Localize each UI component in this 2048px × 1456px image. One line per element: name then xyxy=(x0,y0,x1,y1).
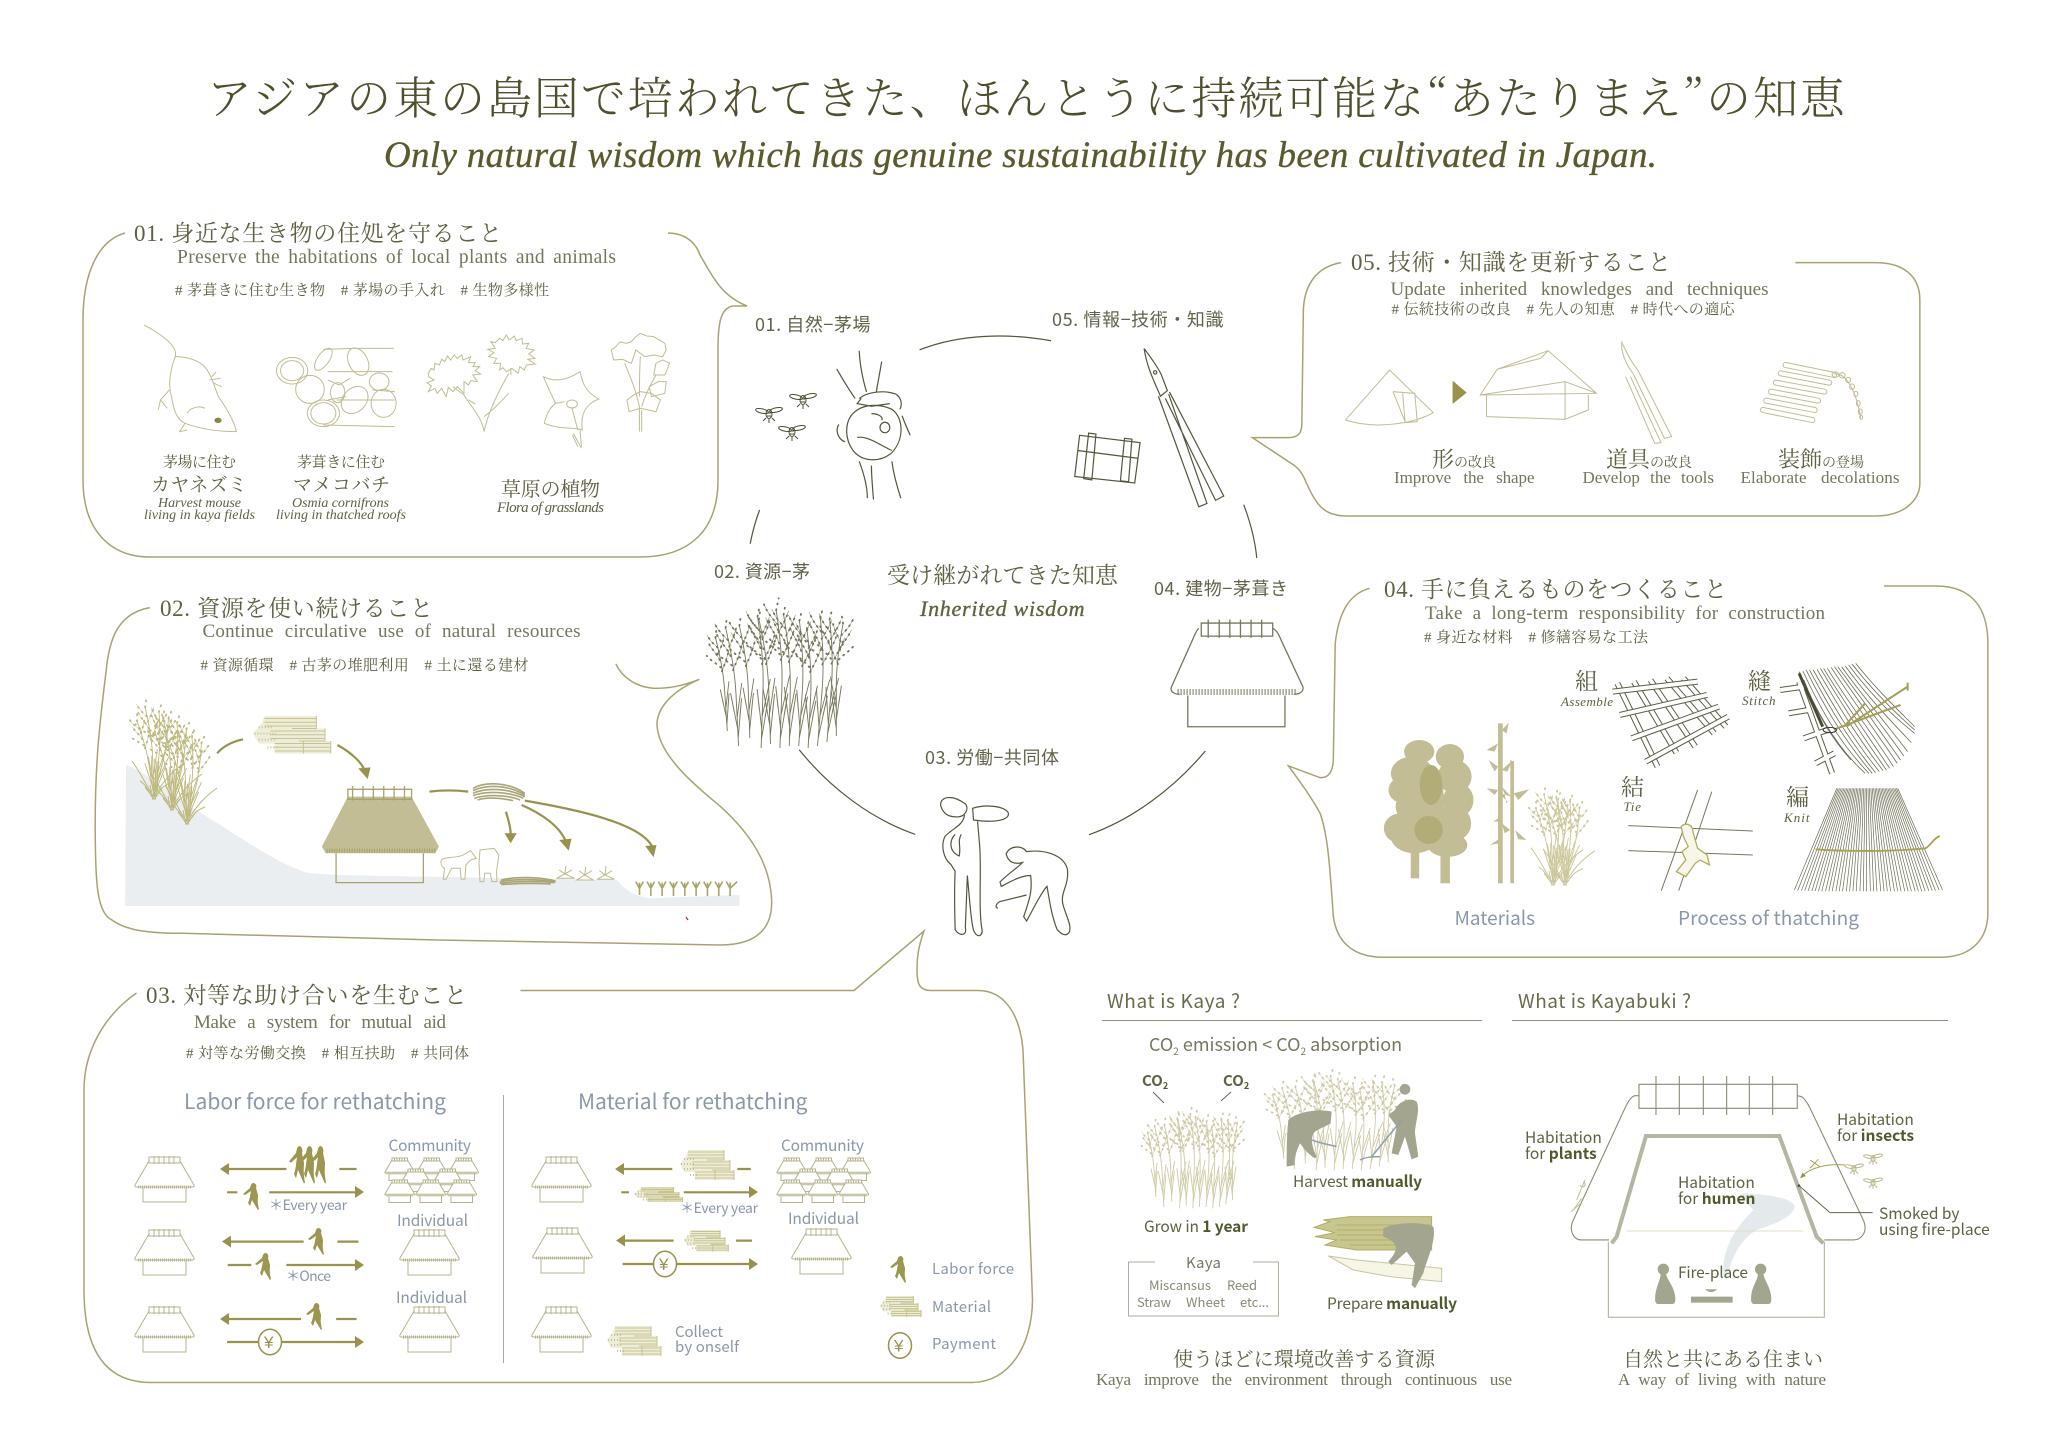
label: flora: 草原の植物 xyxy=(501,478,600,501)
label: insects: insects xyxy=(1861,1124,1914,1146)
caption: tools: Develop the tools xyxy=(1582,468,1714,487)
legend: Labor force xyxy=(932,1258,1014,1279)
center text xyxy=(887,563,1119,621)
label: knit: 編 xyxy=(1786,785,1809,810)
diagram: labor force exchange xyxy=(135,1134,479,1355)
icon: improved tool xyxy=(1622,342,1672,443)
tags 01: # 茅葺きに住む生き物 # 茅場の手入れ # 生物多様性 xyxy=(175,281,549,299)
icon: assemble lattice xyxy=(1613,678,1728,767)
label: mason bee: living in thatched roofs xyxy=(276,508,407,523)
diagram: labor force exchange: Individual xyxy=(397,1209,468,1231)
speech bubble outline xyxy=(1288,586,1988,957)
caption: tools xyxy=(1582,447,1714,487)
caption: decoration: Elaborate decolations xyxy=(1740,468,1900,487)
box: kaya types: Miscansus xyxy=(1149,1275,1211,1294)
icon: mouse on nest xyxy=(837,351,910,499)
title: アジアの東の島国で培われてきた、ほんとうに持続可能な“あたりまえ”の知恵 xyxy=(207,62,1845,127)
heading 05: 05. 技術・知識を更新すること xyxy=(1351,250,1671,275)
co2 icons: CO xyxy=(1223,1070,1244,1091)
co2 balance: absorption xyxy=(1306,1031,1402,1057)
label: prepare: Prepare manually xyxy=(1327,1292,1457,1314)
english heading 04: Take a long-term responsibility for construction xyxy=(1425,603,1826,624)
caption: kaya xyxy=(1096,1348,1512,1389)
label: flora: Flora of grasslands xyxy=(496,500,604,516)
caption: decoration: 装飾の登場 xyxy=(1778,447,1864,472)
diagram: labor force exchange: ＊Every year xyxy=(269,1195,348,1215)
tags 04: # 身近な材料 # 修繕容易な工法 xyxy=(1424,628,1649,646)
label: process: Process of thatching xyxy=(1678,904,1859,931)
heading 03: 03. 対等な助け合いを生むこと xyxy=(146,983,467,1008)
icon: stitch thatch xyxy=(1780,663,1915,773)
label: smoked: using fire-place xyxy=(1879,1218,1990,1240)
diagram: material exchange: ¥ xyxy=(658,1255,669,1274)
caption: kaya: 使うほどに環境改善する資源 xyxy=(1173,1348,1436,1371)
panel: 05 techniques xyxy=(1252,250,1920,516)
label: assemble: 組 xyxy=(1575,669,1598,694)
co2 icons: CO xyxy=(1142,1070,1163,1091)
icon: materials trees bamboo grass xyxy=(1384,723,1595,886)
box: kaya types: Reed xyxy=(1227,1275,1257,1294)
caption: kayabuki xyxy=(1618,1348,1826,1389)
label: flora xyxy=(496,478,604,516)
label: human: humen xyxy=(1702,1187,1755,1209)
label: smoked: Smoked by xyxy=(1879,1202,1960,1224)
panel: 01 habitats xyxy=(83,221,747,557)
label: grow: Grow in 1 year xyxy=(1144,1215,1248,1237)
co2 balance: 2 xyxy=(1300,1043,1306,1058)
speech bubble outline xyxy=(83,233,747,557)
english heading 03: Make a system for mutual aid xyxy=(194,1012,446,1033)
english heading 01: Preserve the habitations of local plants and animals xyxy=(177,247,616,268)
diagram: material exchange xyxy=(532,1134,871,1357)
icon: tool box xyxy=(1075,433,1140,483)
icon: rice field xyxy=(636,882,737,896)
icon: kaya reeds xyxy=(705,598,855,748)
center text: Inherited wisdom xyxy=(919,596,1084,621)
panel: 03 mutual aid xyxy=(84,931,1032,1382)
heading: material: Material for rethatching xyxy=(578,1086,808,1116)
label: fire-place: Fire-place xyxy=(1678,1261,1748,1283)
english heading 02: Continue circulative use of natural resources xyxy=(202,621,580,642)
icon: thatched house xyxy=(322,786,439,883)
label: mason bee xyxy=(276,453,407,523)
tags 02: # 資源循環 # 古茅の堆肥利用 # 土に還る建材 xyxy=(200,656,528,674)
icon: preparing thatch xyxy=(1314,1217,1442,1288)
legend: ¥ xyxy=(893,1336,904,1356)
central cycle xyxy=(705,306,1303,936)
label: knit xyxy=(1783,785,1810,825)
box: kaya types: etc... xyxy=(1240,1292,1269,1311)
label: building: 04. 建物−茅葺き xyxy=(1154,575,1288,601)
caption: shape xyxy=(1394,447,1534,487)
label: harvest mouse: 茅場に住む xyxy=(163,453,236,471)
caption: kayabuki: 自然と共にある住まい xyxy=(1623,1348,1823,1371)
panel: 02 resources xyxy=(95,596,772,945)
box: kaya types: Straw xyxy=(1137,1292,1172,1311)
label: harvest mouse: living in kaya fields xyxy=(144,508,256,523)
legend: Payment xyxy=(932,1333,996,1354)
label: assemble xyxy=(1560,669,1613,709)
panel: 04 construction xyxy=(1288,577,1988,957)
label: insects: Habitation xyxy=(1837,1108,1914,1130)
flow arrows xyxy=(217,739,656,857)
label: plants: plants xyxy=(1549,1142,1597,1164)
label: mason bee: マメコバチ xyxy=(293,475,390,496)
speech bubble outline xyxy=(84,931,1032,1382)
caption: shape: Improve the shape xyxy=(1394,468,1534,487)
icon: harvesting people xyxy=(1263,1068,1418,1171)
icon: growing kaya xyxy=(1140,1106,1246,1209)
label: human: Habitation xyxy=(1678,1171,1755,1193)
co2 icons: 2 xyxy=(1163,1079,1168,1092)
diagram: material exchange: ＊Every year xyxy=(680,1198,759,1218)
label: harvest mouse: Harvest mouse xyxy=(157,496,241,511)
tags 03: # 対等な労働交換 # 相互扶助 # 共同体 xyxy=(186,1045,469,1062)
icon: radish crops xyxy=(556,866,614,880)
label: mason bee: 茅葺きに住む xyxy=(297,453,385,471)
icon: bees xyxy=(755,392,817,441)
label: resource: 02. 資源−茅 xyxy=(714,558,810,584)
heading: what is kaya: What is Kaya ? xyxy=(1107,987,1240,1014)
label: insects: for xyxy=(1837,1124,1861,1146)
diagram: labor force exchange: Community xyxy=(388,1134,471,1156)
icon: knit thatch xyxy=(1794,788,1943,891)
diagram: kayabuki section xyxy=(1571,1076,1873,1317)
label: harvest mouse: カヤネズミ xyxy=(151,474,247,496)
label: plants: Habitation xyxy=(1525,1126,1602,1148)
heading 01: 01. 身近な生き物の住処を守ること xyxy=(134,221,502,246)
label: labor: 03. 労働−共同体 xyxy=(925,744,1059,770)
label: tie: Tie xyxy=(1624,799,1641,814)
box: kaya types: Wheet xyxy=(1186,1292,1225,1311)
label: stitch xyxy=(1742,669,1776,708)
diagram: material exchange: Collect xyxy=(675,1321,723,1342)
label: human: for xyxy=(1678,1187,1702,1209)
diagram: labor force exchange: Individual xyxy=(396,1286,467,1308)
label: harvest mouse xyxy=(144,453,256,523)
cycle arcs xyxy=(750,336,1257,835)
diagram: labor force exchange: ¥ xyxy=(263,1333,274,1352)
heading: what is kayabuki: What is Kayabuki ? xyxy=(1518,987,1691,1014)
label: mason bee: Osmia cornifrons xyxy=(292,496,390,511)
label: materials: Materials xyxy=(1454,904,1535,931)
icon: bee in thatch tubes xyxy=(277,346,396,427)
caption: kayabuki: A way of living with nature xyxy=(1618,1370,1826,1389)
co2 icons: 2 xyxy=(1244,1079,1249,1092)
icon: decorated ridge xyxy=(1763,365,1863,420)
icon: old thatch piles xyxy=(473,784,555,885)
heading 04: 04. 手に負えるものをつくること xyxy=(1384,577,1727,602)
label: plants: for xyxy=(1525,1142,1549,1164)
icon: thatching shears xyxy=(1144,349,1224,507)
label: stitch: Stitch xyxy=(1742,693,1776,708)
section: what is kayabuki xyxy=(1512,987,1990,1389)
label: nature: 01. 自然−茅場 xyxy=(755,311,870,337)
icon: improved house shapes xyxy=(1345,351,1597,425)
label: tie xyxy=(1621,775,1644,814)
speech bubble outline xyxy=(95,608,772,945)
section: what is kaya xyxy=(1096,987,1512,1389)
label: tie: 結 xyxy=(1621,775,1644,800)
diagram: material exchange: by onself xyxy=(675,1336,740,1357)
icon: horse and cow xyxy=(441,848,499,882)
center text: 受け継がれてきた知恵 xyxy=(887,563,1119,588)
icon: people carrying thatch xyxy=(941,798,1070,936)
diagram: material exchange: Individual xyxy=(788,1207,859,1229)
icon: kaya plants xyxy=(127,699,217,825)
icon: bundles xyxy=(253,716,331,754)
box: kaya types: Kaya xyxy=(1186,1252,1221,1273)
label: stitch: 縫 xyxy=(1748,669,1771,694)
icon: house outline xyxy=(1171,620,1303,727)
english heading 05: Update inherited knowledges and techniques xyxy=(1390,279,1768,300)
legend: Material xyxy=(932,1296,991,1317)
label: assemble: Assemble xyxy=(1560,694,1613,709)
icon: harvest mouse xyxy=(144,325,236,432)
heading: labor force: Labor force for rethatching xyxy=(184,1086,446,1116)
co2 balance: 2 xyxy=(1173,1043,1179,1058)
icon: tie knot xyxy=(1628,790,1753,891)
co2 balance: emission < CO xyxy=(1179,1031,1300,1057)
tags 05: # 伝統技術の改良 # 先人の知恵 # 時代への適応 xyxy=(1392,300,1735,318)
legend xyxy=(880,1256,1014,1358)
hillside xyxy=(125,765,740,906)
label: harvest: Harvest manually xyxy=(1293,1170,1422,1192)
caption: tools: 道具の改良 xyxy=(1606,447,1692,472)
box: kaya types xyxy=(1128,1252,1278,1316)
caption: shape: 形の改良 xyxy=(1432,447,1496,472)
label: knit: Knit xyxy=(1783,810,1810,825)
caption: kaya: Kaya improve the environment through continuous use xyxy=(1096,1370,1512,1389)
caption: decoration xyxy=(1740,447,1900,487)
co2 icons xyxy=(1142,1070,1249,1103)
icon: small bees xyxy=(1844,1153,1883,1189)
heading 02: 02. 資源を使い続けること xyxy=(160,596,433,621)
subtitle: Only natural wisdom which has genuine sustainability has been cultivated in Japan. xyxy=(384,135,1657,176)
diagram: material exchange: Community xyxy=(781,1134,864,1156)
label: information: 05. 情報−技術・知識 xyxy=(1052,306,1224,332)
diagram: labor force exchange: ＊Once xyxy=(286,1266,331,1286)
speech bubble outline xyxy=(1252,263,1920,516)
co2 balance: CO xyxy=(1149,1031,1173,1057)
icon: grassland flowers xyxy=(427,333,669,448)
